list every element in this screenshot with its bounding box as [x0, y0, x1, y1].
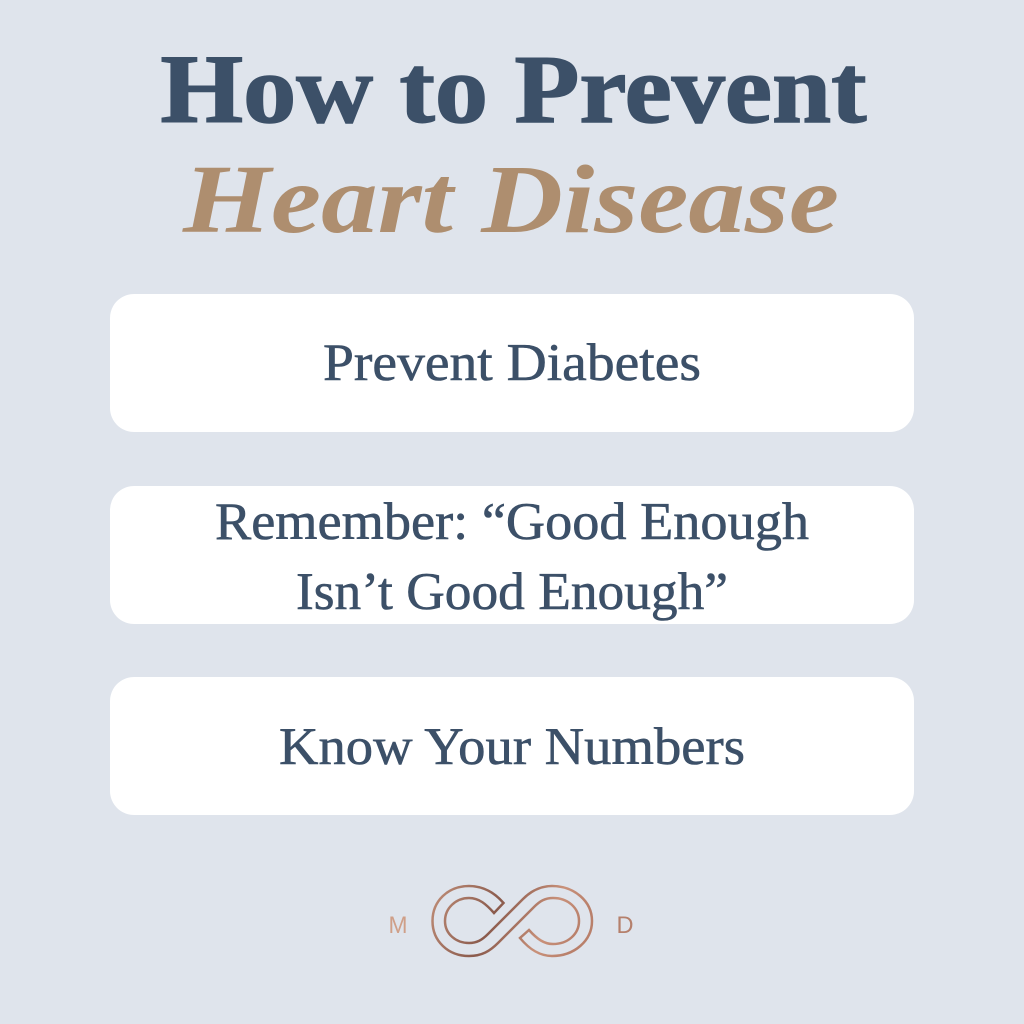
panel: Good Enough: Isn’t Good Enough” [296, 563, 728, 621]
logo letter M: M [388, 912, 408, 939]
panel: Know Your Numbers: Know Your Numbers [279, 718, 745, 776]
logo [388, 886, 634, 956]
panel: Prevent Diabetes: Prevent Diabetes [323, 334, 701, 392]
panel: Prevent Diabetes [110, 294, 914, 432]
heading: Heart Disease: Heart Disease [182, 146, 839, 254]
logo letter D: D [616, 912, 634, 939]
panel: Good Enough: Remember: “Good Enough [215, 493, 809, 551]
panel: Know Your Numbers [110, 677, 914, 815]
heading: How to Prevent: How to Prevent [160, 36, 867, 144]
panel: Good Enough [110, 486, 914, 624]
icon: infinity mark [432, 886, 592, 956]
title [160, 36, 867, 254]
